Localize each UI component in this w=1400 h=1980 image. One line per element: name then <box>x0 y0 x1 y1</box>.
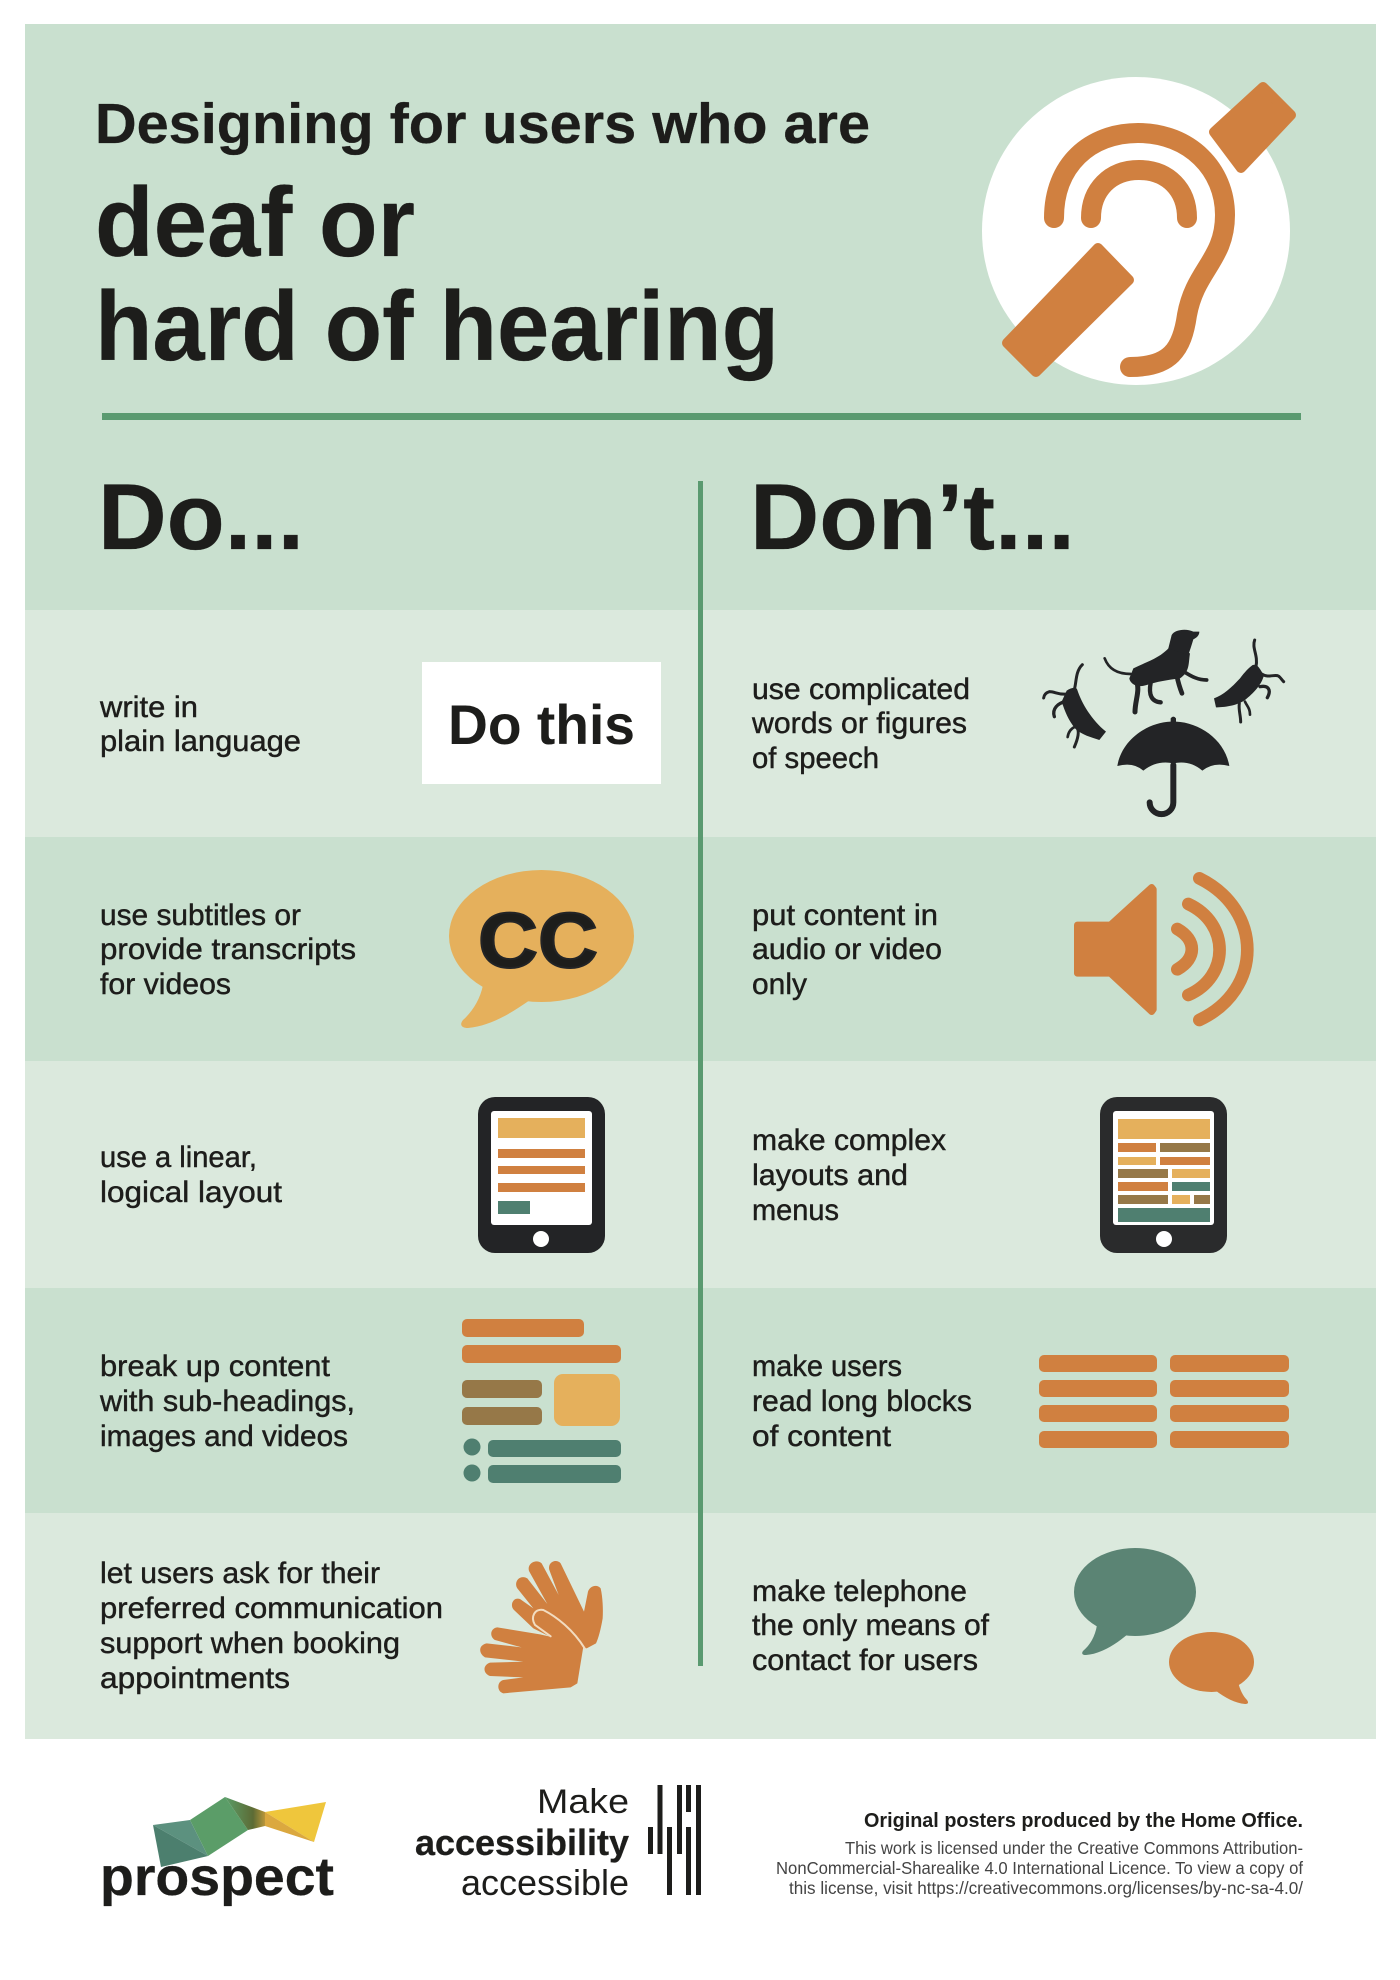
column divider <box>698 481 703 1666</box>
text: break up content: images and videos <box>100 1420 348 1453</box>
text: put content in audio: only <box>752 968 807 1001</box>
text: complex layouts <box>752 1124 946 1227</box>
text: break up content: break up content <box>100 1350 331 1383</box>
credit and licence: this license, visit https://creativecommons.org/licenses/by-nc-sa-4.0/ <box>789 1878 1303 1898</box>
text: use subtitles: use subtitles or <box>100 899 301 932</box>
logo: prospect <box>100 1797 334 1907</box>
icon: structured content blocks <box>462 1319 621 1483</box>
text: put content in audio <box>752 899 942 1001</box>
text: write in plain language: plain language <box>100 725 301 758</box>
text: communication support: preferred communication <box>100 1592 443 1625</box>
row band: row 3 <box>25 1061 1376 1288</box>
text: communication support: let users ask for their <box>100 1557 380 1590</box>
logo: make accessibility accessible: accessibility <box>415 1822 629 1863</box>
text: complex layouts: make complex <box>752 1124 946 1157</box>
icon: cat left <box>1044 665 1106 747</box>
icon: dog <box>1105 630 1207 712</box>
icon: speaker <box>1077 878 1247 1020</box>
icon: CC speech bubble <box>449 870 634 1028</box>
credit and licence <box>776 1810 1303 1898</box>
icon: tablet with complex layout <box>1100 1097 1227 1253</box>
heading: Do: Do... <box>98 464 304 569</box>
text: telephone <box>752 1575 990 1677</box>
row band: row 5 <box>25 1513 1376 1739</box>
logo: make accessibility accessible: accessible <box>461 1862 629 1903</box>
text: use a complicated words: words or figures <box>751 707 967 740</box>
front hand <box>480 1610 583 1693</box>
logo: prospect: prospect <box>100 1847 334 1907</box>
heading: Don't: Don’t... <box>750 464 1075 569</box>
text: linear layout: logical layout <box>100 1176 283 1209</box>
text: use subtitles <box>100 899 356 1001</box>
text: put content in audio: put content in <box>752 899 938 932</box>
text: use subtitles: for videos <box>100 968 231 1001</box>
text: long blocks <box>752 1350 972 1453</box>
text: telephone: contact for users <box>752 1644 978 1677</box>
back hand <box>512 1561 603 1648</box>
text: complex layouts: layouts and <box>752 1159 908 1192</box>
icon: two speech bubbles <box>1074 1548 1254 1704</box>
text: use a complicated words: use complicated <box>752 673 970 706</box>
hand outline <box>533 1610 585 1648</box>
credit and licence: NonCommercial-Sharealike 4.0 International Licence. To view a copy of <box>776 1858 1303 1878</box>
icon: Do this sign <box>422 662 661 784</box>
text: long blocks: of content <box>752 1420 892 1453</box>
text: linear layout: use a linear, <box>100 1141 257 1174</box>
text: use subtitles: provide transcripts <box>100 933 356 966</box>
logo: make accessibility accessible <box>415 1783 701 1903</box>
text: long blocks: read long blocks <box>752 1385 972 1418</box>
text: communication support: support when booking <box>100 1627 400 1660</box>
text: break up content <box>99 1350 355 1453</box>
text: communication support: appointments <box>100 1662 290 1695</box>
text: complex layouts: menus <box>752 1194 839 1227</box>
text: write in plain language: write in <box>99 691 198 724</box>
title: hard of hearing <box>95 271 779 381</box>
icon: CC speech bubble: CC <box>478 896 598 984</box>
icon: hearing loss symbol <box>982 77 1291 385</box>
title <box>95 92 870 381</box>
icon: Do this sign: Do this <box>448 693 635 756</box>
credit and licence: Original posters produced by the Home Office. <box>864 1810 1303 1832</box>
text: break up content: with sub-headings, <box>99 1385 355 1418</box>
icon: umbrella <box>1117 717 1229 814</box>
icon: tablet with linear layout <box>478 1097 605 1253</box>
heading divider <box>102 413 1301 420</box>
text: communication support <box>100 1557 443 1695</box>
logo: make accessibility accessible: Make <box>537 1783 629 1821</box>
logo bars <box>648 1785 701 1895</box>
title: deaf or <box>95 167 415 277</box>
text: telephone: the only means of <box>752 1609 990 1642</box>
text: use a complicated words <box>751 673 970 775</box>
icon: long text blocks <box>1039 1355 1289 1448</box>
icon: cat right <box>1214 640 1284 722</box>
text: write in plain language <box>99 691 301 758</box>
text: long blocks: make users <box>752 1350 902 1383</box>
text: linear layout <box>100 1141 283 1209</box>
credit and licence: This work is licensed under the Creative Commons Attribution- <box>845 1838 1303 1858</box>
title: Designing for users who are <box>95 92 870 156</box>
icon: signing hands <box>480 1561 603 1693</box>
row band: row 1 <box>25 610 1376 837</box>
text: telephone: make telephone <box>752 1575 967 1608</box>
icon: raining cats and dogs <box>1044 630 1284 814</box>
text: use a complicated words: of speech <box>752 742 879 775</box>
text: put content in audio: audio or video <box>752 933 942 966</box>
logo mark <box>153 1797 326 1867</box>
